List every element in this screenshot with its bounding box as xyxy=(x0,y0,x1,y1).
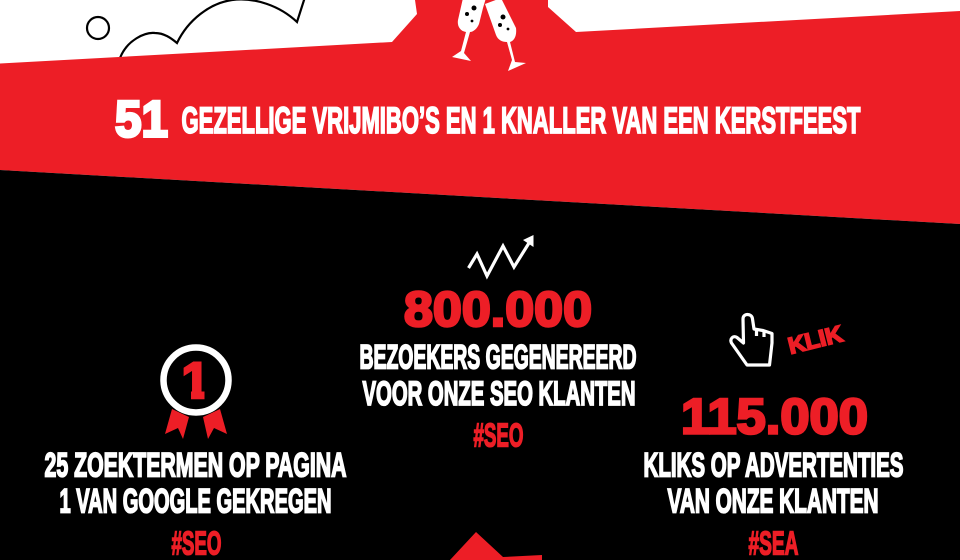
icon: award ribbon with number 1: 1 xyxy=(181,352,210,409)
stat: 115.000 clicks: 115.000 xyxy=(681,388,868,444)
stat: 25 search terms: 25 ZOEKTERMEN OP PAGINA xyxy=(44,446,346,484)
heading: vrijmibo banner xyxy=(115,90,861,148)
panel: black lower area xyxy=(0,170,960,560)
panel: red shape at bottom xyxy=(450,532,542,560)
stat: 800.000 visitors: VOOR ONZE SEO KLANTEN xyxy=(362,375,636,413)
icon: champagne glasses xyxy=(452,0,526,71)
label: klik: KLIK xyxy=(785,320,845,359)
icon: award ribbon with number 1 xyxy=(164,348,228,439)
icon: cloud outline xyxy=(87,0,305,58)
stat: 800.000 visitors: #SEO xyxy=(474,416,524,454)
stat: 25 search terms: 1 VAN GOOGLE GEKREGEN xyxy=(60,482,332,520)
heading: vrijmibo banner: 51 xyxy=(115,90,168,148)
stat: 800.000 visitors: BEZOEKERS GEGENEREERD xyxy=(360,338,636,376)
stat: 800.000 visitors: 800.000 xyxy=(404,283,592,337)
stat: 800.000 visitors xyxy=(360,283,636,454)
panel: white top area xyxy=(0,0,960,230)
icon: rising trend arrow xyxy=(468,235,534,276)
stat: 115.000 clicks xyxy=(644,388,904,560)
stat: 25 search terms xyxy=(44,446,346,560)
icon: pointing hand cursor xyxy=(731,314,772,365)
panel: red banner xyxy=(0,0,960,224)
